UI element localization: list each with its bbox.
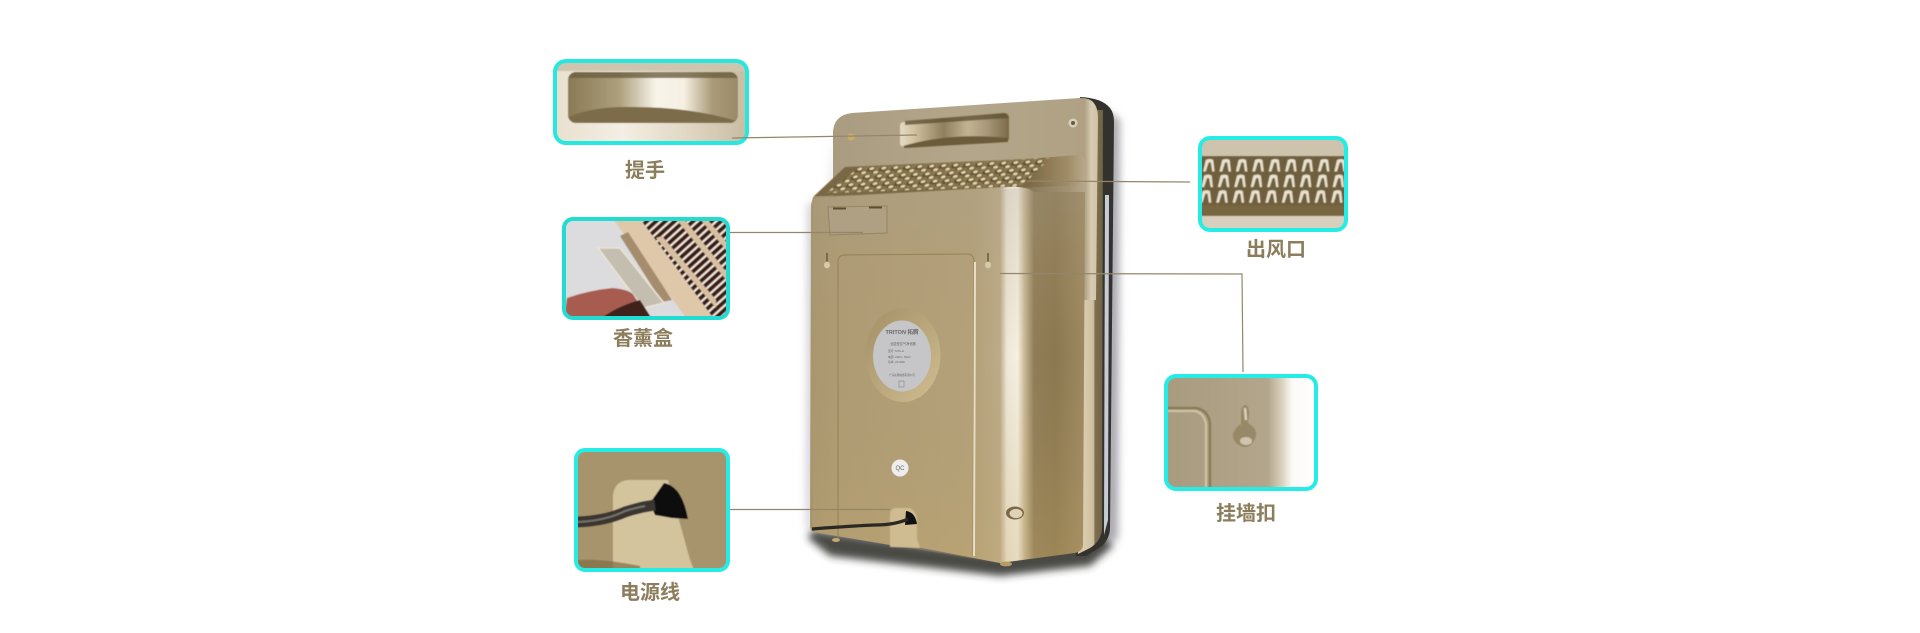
drop shadow [806, 110, 1120, 576]
inner back panel [838, 254, 974, 556]
recess behind vent [1016, 155, 1085, 240]
power cord notch [812, 508, 920, 548]
wall hook slots [824, 253, 991, 268]
rating label: TRITON 拓腾 [886, 328, 919, 336]
rating label: 电源: 220V~ 50Hz [888, 355, 911, 359]
side edge [1076, 97, 1114, 556]
leader line: power cord [730, 508, 890, 510]
rating label [866, 308, 940, 402]
back plate [833, 98, 1098, 300]
label: 提手: 提手 [625, 159, 665, 182]
vent grille [813, 158, 1050, 197]
callout: power cord [576, 450, 728, 572]
feet [832, 538, 1012, 566]
leader line: handle [732, 135, 917, 138]
leader line: wall hook [1000, 274, 1243, 372]
side glass strip [1104, 195, 1109, 535]
label: 电源线: 电源线 [620, 581, 680, 604]
scent box cover [828, 206, 887, 235]
leader line: air outlet [1027, 181, 1190, 182]
rating label: 功率: 23-50W [888, 360, 905, 364]
callout: wall hook [1166, 376, 1316, 489]
QC sticker: QC [896, 466, 905, 472]
callout: scent box [564, 219, 728, 319]
rating label: 型号: M7S-H [888, 349, 904, 353]
label: 挂墙扣: 挂墙扣 [1216, 502, 1276, 525]
callout: air outlet [1200, 138, 1346, 230]
air purifier back view [806, 97, 1120, 576]
side hole [1006, 506, 1024, 520]
leader line: scent box [730, 232, 863, 234]
label: 香薰盒: 香薰盒 [613, 326, 673, 350]
callout: handle [555, 61, 747, 143]
right frame band [1078, 110, 1103, 554]
main body [810, 187, 1085, 563]
rating label: 全能型空气净化器 [890, 341, 917, 346]
QC sticker [892, 460, 908, 476]
label: 出风口: 出风口 [1246, 238, 1306, 261]
screws [848, 118, 1078, 140]
handle [900, 113, 1009, 148]
rating label: 广东拓腾电器有限公司 [889, 373, 915, 377]
